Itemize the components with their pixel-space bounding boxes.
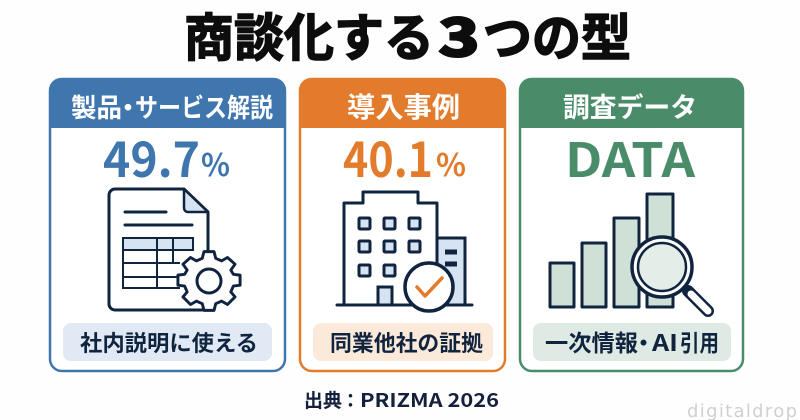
source note: PRIZMA 2026 xyxy=(360,386,499,413)
icon: check badge xyxy=(405,263,453,311)
pill: 一次情報・AI引用: ・ xyxy=(632,324,655,358)
pill: 一次情報・AI引用 xyxy=(533,323,731,361)
panel header: blue xyxy=(49,78,286,128)
icon: document with table and gear xyxy=(109,189,240,310)
stat: DATA: DATA xyxy=(565,122,696,191)
pill: 一次情報・AI引用: 一次情報 xyxy=(545,324,638,358)
icon: gear xyxy=(178,252,240,310)
panel header: green xyxy=(519,78,744,128)
stat: 40.1%: % xyxy=(436,140,466,185)
heading: 導入事例: 導入事例 xyxy=(347,86,460,126)
pill: 一次情報・AI引用: AI xyxy=(651,324,678,358)
icon: bar chart with magnifier xyxy=(550,194,708,311)
heading: 製品・サービス解説 xyxy=(71,88,273,125)
panel: 調査データ xyxy=(519,78,744,371)
stat: 40.1%: 40.1 xyxy=(343,121,433,191)
stat: 49.7%: % xyxy=(201,140,230,185)
icon: magnifier xyxy=(632,237,708,311)
panel: 導入事例 xyxy=(299,78,506,371)
pill: 一次情報・AI引用: 引用 xyxy=(680,324,719,358)
pill: 社内説明に使える: 社内説明に使える xyxy=(80,326,258,358)
source note: 出典 xyxy=(304,386,342,413)
stat: 49.7%: 49.7 xyxy=(103,121,200,191)
heading: 製品・サービス解説: 製品 xyxy=(71,88,122,125)
panel: 製品・サービス解説 xyxy=(49,78,286,371)
pill: 同業他社の証拠: 同業他社の証拠 xyxy=(330,326,483,358)
source note: ： xyxy=(341,386,360,413)
source note xyxy=(304,386,499,413)
panel header: orange xyxy=(299,78,506,128)
heading: 調査データ: 調査データ xyxy=(563,86,697,125)
heading: 製品・サービス解説: ・ xyxy=(115,88,141,125)
heading: 製品・サービス解説: サービス解説 xyxy=(135,88,273,125)
title xyxy=(184,0,631,71)
icon: office building with check badge xyxy=(337,192,472,311)
